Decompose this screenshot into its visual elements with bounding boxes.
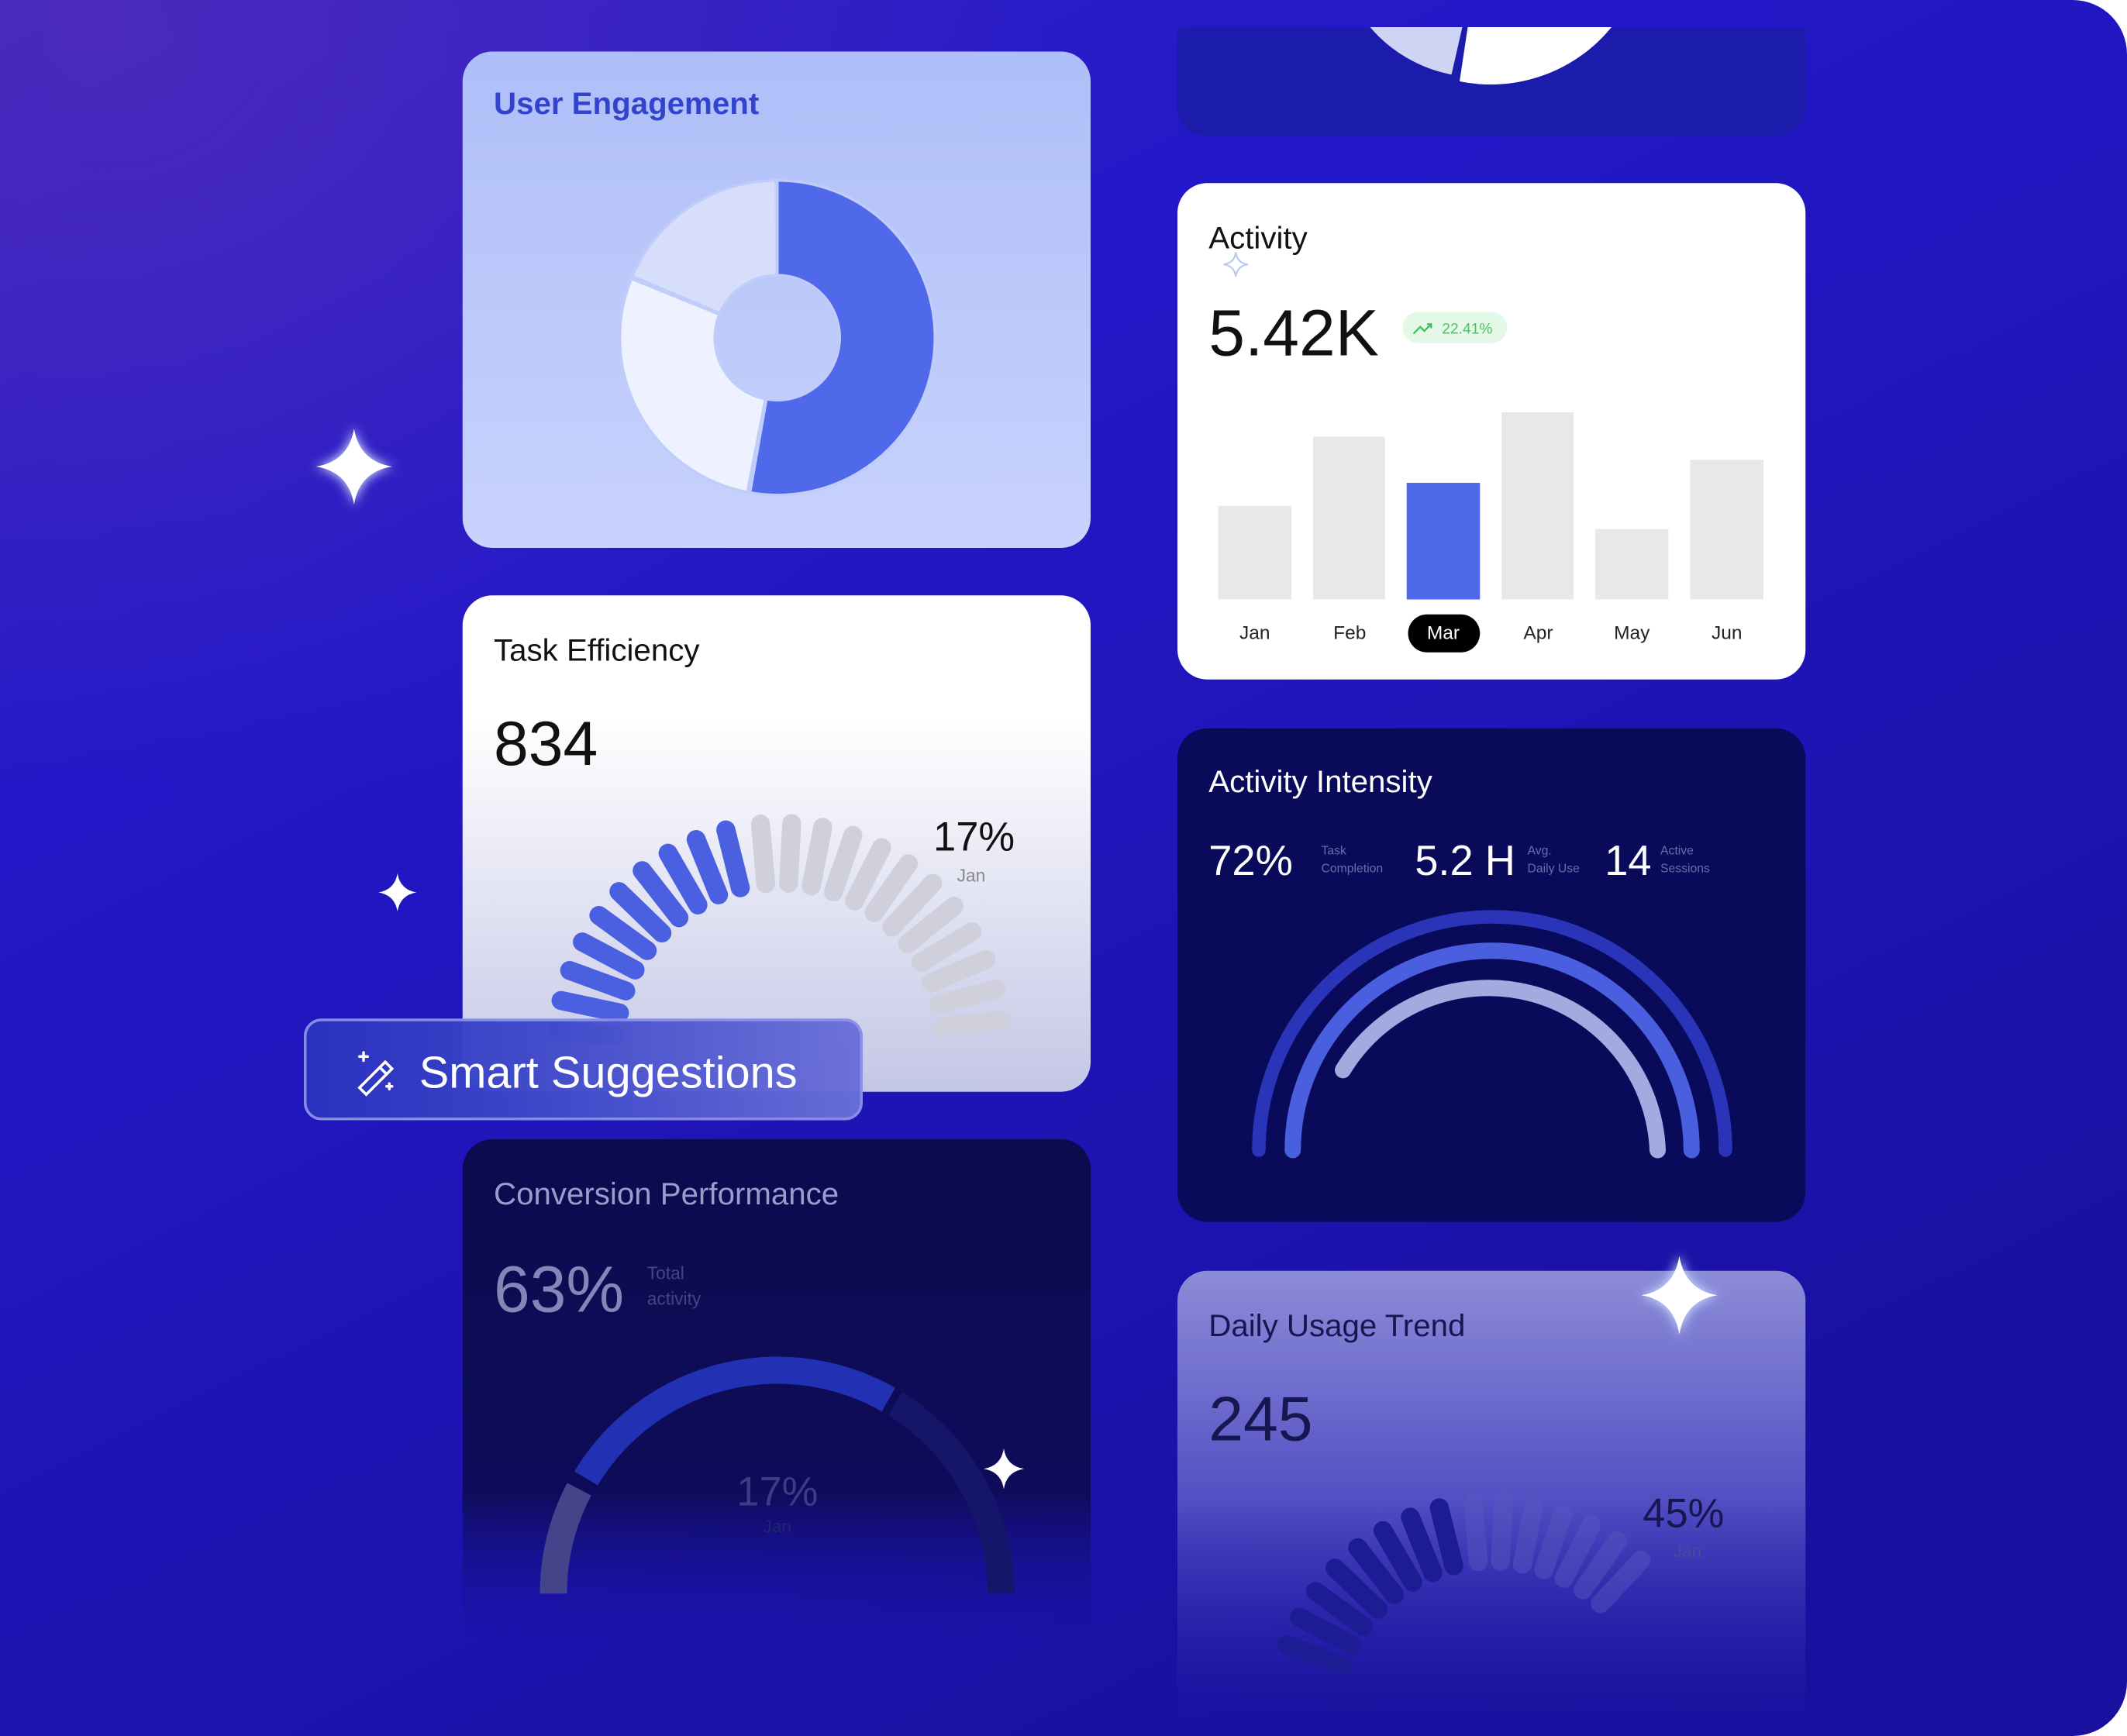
label: 17% Jan: Jan xyxy=(957,865,985,886)
icon: magic wand xyxy=(360,1052,392,1094)
value: 245: 245 xyxy=(1208,1385,1313,1455)
gauge: tick gauge xyxy=(1275,1492,1654,1678)
value: 63% xyxy=(494,1252,702,1325)
icon: small sparkle xyxy=(1223,253,1248,277)
label: 45% Jan: Jan xyxy=(1674,1541,1701,1561)
panel: conversion performance xyxy=(463,1139,1091,1641)
gauge: concentric arcs xyxy=(1259,917,1725,1150)
label: 17% Jan xyxy=(933,814,1015,885)
stats row: 5.2 H xyxy=(1415,838,1515,884)
value: 834: 834 xyxy=(494,709,598,779)
panel: daily usage trend xyxy=(1177,1271,1805,1722)
stats row: 72% xyxy=(1208,838,1293,884)
stats row: Avg. xyxy=(1527,845,1552,858)
bar chart: May xyxy=(1614,622,1650,643)
heading: user engagement: User Engagement xyxy=(494,86,759,121)
bar chart: Jan xyxy=(1239,622,1270,643)
label: 17% Jan: 17% xyxy=(736,1469,818,1515)
stats row: Sessions xyxy=(1660,862,1710,875)
gauge: arc xyxy=(553,1370,1001,1593)
stats row xyxy=(1208,838,1710,884)
stats row: Active xyxy=(1660,845,1694,858)
label: 45% Jan: 45% xyxy=(1643,1491,1724,1537)
gauge: tick gauge xyxy=(546,814,1012,1045)
bar chart: Mar xyxy=(1427,622,1460,643)
panel: top pie card xyxy=(1177,27,1805,136)
icon: sparkle large right xyxy=(1639,1253,1720,1338)
heading: conversion performance: Conversion Performance xyxy=(494,1176,839,1211)
label: 17% Jan: Jan xyxy=(763,1516,791,1537)
value: 63%: Total xyxy=(647,1262,684,1283)
label: 45% Jan xyxy=(1643,1491,1724,1561)
label: 17% Jan: 17% xyxy=(933,814,1015,859)
panel: activity intensity xyxy=(1177,728,1805,1222)
icon: sparkle conversion xyxy=(984,1448,1024,1490)
label: 17% Jan xyxy=(736,1469,818,1536)
heading: daily usage trend: Daily Usage Trend xyxy=(1208,1308,1465,1343)
badge: growth: 22.41% xyxy=(1442,322,1493,338)
bar chart xyxy=(1219,412,1763,653)
stats row: Completion xyxy=(1322,862,1383,875)
stats row: Task xyxy=(1322,845,1346,858)
button: smart suggestions: Smart Suggestions xyxy=(419,1049,798,1098)
value: 63%: 63% xyxy=(494,1252,624,1325)
icon: sparkle small left xyxy=(378,873,416,911)
value: 5.42K: 5.42K xyxy=(1208,297,1379,370)
heading: activity: Activity xyxy=(1208,220,1308,255)
bar chart: Jun xyxy=(1712,622,1743,643)
badge: growth xyxy=(1403,312,1507,343)
panel: user engagement xyxy=(463,51,1091,548)
stats row: Daily Use xyxy=(1527,862,1580,875)
heading: task efficiency: Task Efficiency xyxy=(494,632,700,667)
panel: task efficiency xyxy=(463,595,1091,1092)
button: smart suggestions xyxy=(305,1020,861,1119)
donut chart xyxy=(620,181,935,495)
stats row: 14 xyxy=(1605,838,1652,884)
bar chart: Feb xyxy=(1333,622,1366,643)
value: 63%: activity xyxy=(647,1289,702,1309)
icon: sparkle large left xyxy=(313,426,395,507)
heading: activity intensity: Activity Intensity xyxy=(1208,764,1433,799)
bar chart: Apr xyxy=(1523,622,1553,643)
panel: activity xyxy=(1177,183,1805,680)
